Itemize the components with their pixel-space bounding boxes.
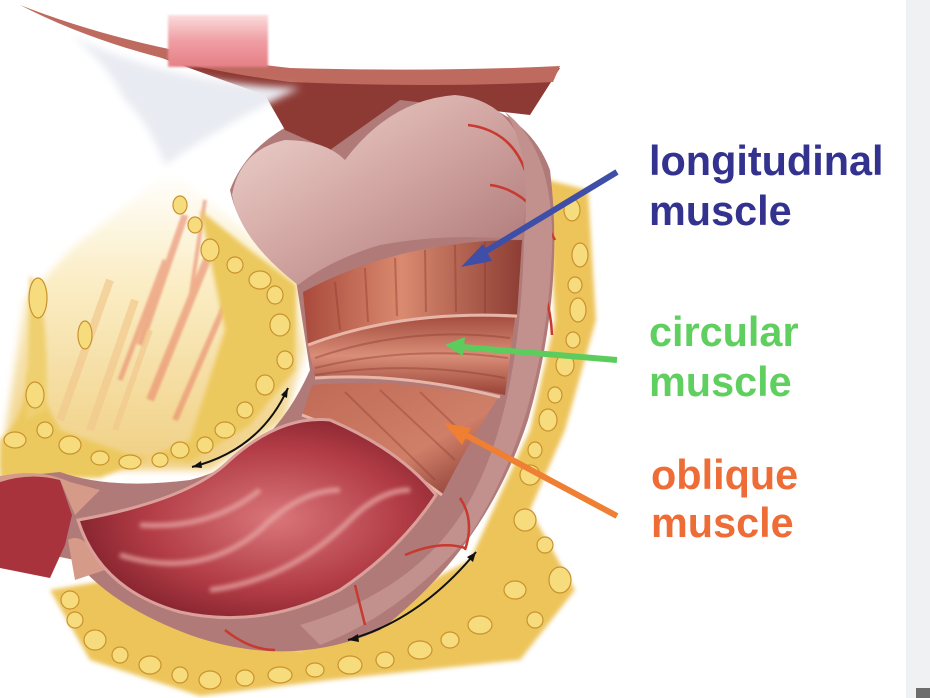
- wall vessels: [225, 498, 469, 650]
- top wall flap: [20, 5, 560, 150]
- arrow: circular: [445, 337, 617, 360]
- layer edges: [302, 315, 517, 495]
- label: circular muscle: [649, 309, 799, 405]
- arrow: oblique: [444, 423, 617, 516]
- label: oblique muscle: oblique: [651, 452, 798, 498]
- arrow: longitudinal: [461, 172, 617, 267]
- fat deposits: [0, 180, 596, 696]
- longitudinal layer: [303, 240, 522, 345]
- stomach outer wall: [0, 95, 554, 651]
- scrollbar thumb: [916, 688, 930, 698]
- pylorus: [0, 473, 105, 580]
- label: longitudinal muscle: [649, 138, 884, 234]
- background strip: [906, 0, 930, 698]
- label: longitudinal muscle: longitudinal: [649, 138, 884, 184]
- label: oblique muscle: [651, 452, 798, 546]
- muscle layers: [302, 240, 522, 495]
- ligament: [70, 35, 300, 165]
- label: circular muscle: circular: [649, 309, 799, 355]
- esophagus stub: [168, 15, 268, 67]
- oblique layer: [302, 383, 498, 495]
- fundus vessels: [468, 125, 555, 335]
- label: longitudinal muscle: muscle: [649, 188, 792, 234]
- mucosa: [78, 420, 436, 618]
- circular layer: [308, 317, 515, 395]
- right wall band: [300, 112, 552, 645]
- omentum fan: [0, 170, 305, 470]
- label: oblique muscle: muscle: [651, 500, 794, 546]
- fundus inner lining: [232, 95, 530, 285]
- curved arrow upper: [192, 388, 288, 468]
- curved arrow lower: [348, 552, 476, 642]
- label: circular muscle: muscle: [649, 359, 792, 405]
